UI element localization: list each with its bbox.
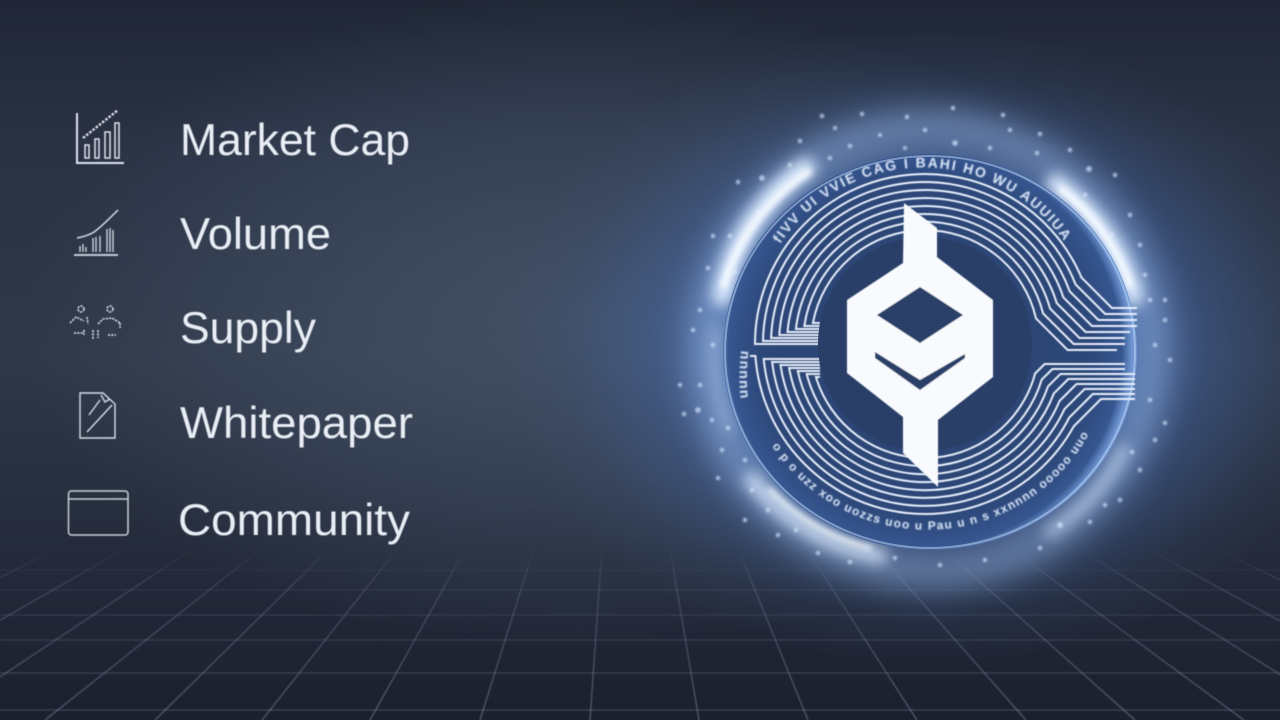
icon: market cap chart: [77, 110, 124, 163]
label: Market Cap: Market Cap: [180, 116, 410, 165]
coin edge text: [738, 156, 1088, 531]
glow halo: [708, 128, 1152, 572]
particle field: [678, 106, 1172, 567]
item: Whitepaper: [80, 393, 413, 448]
label: Whitepaper: Whitepaper: [180, 399, 413, 448]
central logo: [847, 203, 993, 487]
logo chevron: [875, 352, 965, 390]
icon: supply network: [70, 306, 120, 340]
icon: volume chart: [74, 210, 118, 255]
left inscription: uuuuu: [738, 350, 750, 399]
bright rim arcs: [724, 172, 1130, 548]
circuit rings: [750, 174, 1137, 514]
item: Community: [68, 491, 411, 545]
coin rim line: [725, 156, 1135, 548]
label: Supply: Supply: [180, 304, 317, 353]
label: Volume: Volume: [180, 210, 331, 259]
bottom inscription: o p o uzz xoo uozzs uoo u Pau u n s xxnnnn ooooo uuo: [772, 432, 1088, 531]
coin disk: [723, 154, 1137, 550]
soft rim glow: [715, 168, 1134, 556]
floor cross lines: [0, 570, 1280, 710]
feature list: [68, 110, 413, 545]
item: Volume: [74, 210, 331, 259]
centre disc: [818, 237, 1032, 451]
item: Supply: [70, 304, 317, 353]
item: Market Cap: [77, 110, 410, 165]
icon: whitepaper document: [80, 393, 115, 438]
label: Community: Community: [178, 496, 411, 545]
upper traces: [755, 174, 1137, 350]
icon: community window: [68, 491, 128, 535]
coin with glow: [676, 94, 1184, 607]
lower traces: [750, 356, 1135, 514]
logo body: [847, 203, 993, 487]
perspective floor grid: [0, 548, 1280, 720]
logo diamond: [877, 287, 963, 343]
top inscription: fIVV UI VVIE CAG I BAHI HO WU AUUIUA: [772, 156, 1070, 244]
